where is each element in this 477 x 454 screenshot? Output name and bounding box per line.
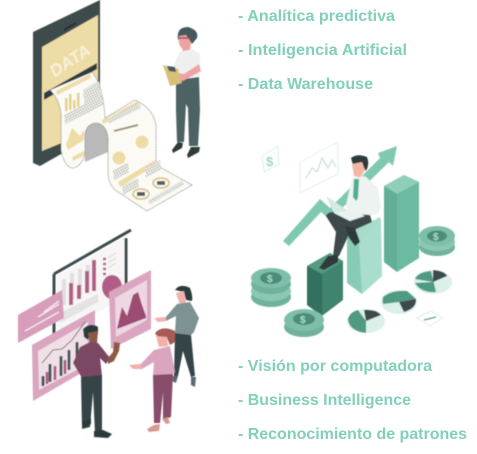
- face: [352, 162, 365, 178]
- face: [176, 291, 186, 305]
- face: [156, 336, 168, 347]
- paper bar chart: [65, 93, 80, 111]
- pie chart right: [414, 270, 452, 294]
- tall bar: [384, 175, 419, 272]
- man in plum shirt: [73, 325, 120, 438]
- hair: [175, 286, 192, 301]
- middle bar: [347, 217, 382, 294]
- printed paper sheet: [50, 72, 192, 211]
- glasses: [179, 37, 190, 39]
- hand: [129, 364, 142, 369]
- list: top techniques: [238, 8, 407, 93]
- phone body: [33, 0, 100, 166]
- paper header bars: [56, 74, 156, 187]
- seated man: [319, 155, 381, 270]
- hair: [351, 155, 368, 171]
- legend text: [108, 253, 116, 268]
- hair: [83, 325, 98, 340]
- arm: [108, 342, 120, 364]
- trousers: [81, 375, 102, 433]
- trousers: [153, 374, 173, 423]
- illustration: phone printing data report: [33, 0, 201, 211]
- bottom coin stack: $: [300, 315, 306, 326]
- text card: [18, 290, 64, 343]
- hair: [178, 27, 197, 44]
- tie: [353, 179, 359, 201]
- paper badges: [133, 189, 149, 199]
- clipboard: [163, 65, 182, 86]
- paper shadow under arch: [85, 123, 108, 162]
- shirt: [174, 49, 200, 80]
- item: Analítica predictiva: - Analítica predictiva: [238, 8, 395, 25]
- line chart card: [300, 142, 338, 193]
- pie chart left: [347, 309, 385, 333]
- item: Reconocimiento de patrones: - Reconocimiento de patrones: [238, 426, 467, 443]
- trousers: [174, 333, 195, 377]
- list: bottom techniques: [238, 358, 467, 443]
- trousers: [326, 212, 372, 256]
- bar chart card: [32, 310, 95, 401]
- item: Data Warehouse: - Data Warehouse: [238, 76, 373, 93]
- right coin stack: $: [433, 232, 439, 243]
- bars: [43, 342, 77, 386]
- illustration: man on growth bars with coins: [251, 142, 455, 337]
- growth arrow: [283, 146, 397, 246]
- face: [88, 331, 98, 345]
- sweater: [140, 346, 175, 375]
- small tag icon: [417, 311, 443, 326]
- hair: [155, 328, 175, 345]
- phone screen: [42, 15, 98, 151]
- shirt: [346, 176, 381, 216]
- item: Inteligencia Artificial: - Inteligencia Artificial: [238, 42, 407, 59]
- item: Business Intelligence: - Business Intelligence: [238, 392, 411, 409]
- dollar note icon: [262, 146, 279, 172]
- printer slot: [44, 63, 97, 100]
- presentation screen: [54, 230, 131, 335]
- shoes: [147, 417, 170, 432]
- laptop: [326, 196, 350, 221]
- hand: [154, 317, 166, 322]
- illustration: team reviewing charts: [18, 230, 199, 438]
- trend line: [42, 322, 85, 363]
- dollar note icon: $: [266, 154, 274, 169]
- magenta bars: [71, 260, 94, 305]
- pie chart middle: [381, 290, 417, 314]
- paper pie charts: [112, 152, 126, 164]
- shoes: [172, 142, 200, 158]
- left coin stack: $: [267, 274, 273, 285]
- paper data tables: [64, 81, 184, 204]
- right coin stack: [419, 226, 455, 256]
- shoe: [319, 255, 338, 270]
- legend marks: [103, 259, 106, 274]
- left coin stack: [251, 268, 291, 307]
- bottom coin stack: [284, 309, 324, 337]
- sweater: [165, 302, 199, 335]
- phone speaker: [64, 22, 76, 31]
- shirt: [73, 342, 110, 378]
- shoes: [172, 376, 196, 387]
- mountain chart card: [109, 270, 151, 349]
- face: [179, 35, 191, 52]
- gray bars: [64, 265, 88, 305]
- screen frame: [54, 230, 131, 335]
- paper area chart: [66, 128, 84, 150]
- woman with clipboard: [163, 27, 201, 158]
- paper text line: [114, 124, 138, 132]
- shoes: [82, 418, 112, 438]
- woman in gray: [154, 286, 199, 387]
- woman in pink: [129, 328, 175, 432]
- item: Visión por computadora: - Visión por computadora: [238, 358, 432, 375]
- table lines: [60, 294, 98, 323]
- short dark bar: [307, 253, 343, 316]
- trousers: [176, 77, 200, 146]
- screen label DATA: DATA: [48, 40, 93, 82]
- arms: [172, 64, 201, 81]
- pie chart: [102, 275, 122, 299]
